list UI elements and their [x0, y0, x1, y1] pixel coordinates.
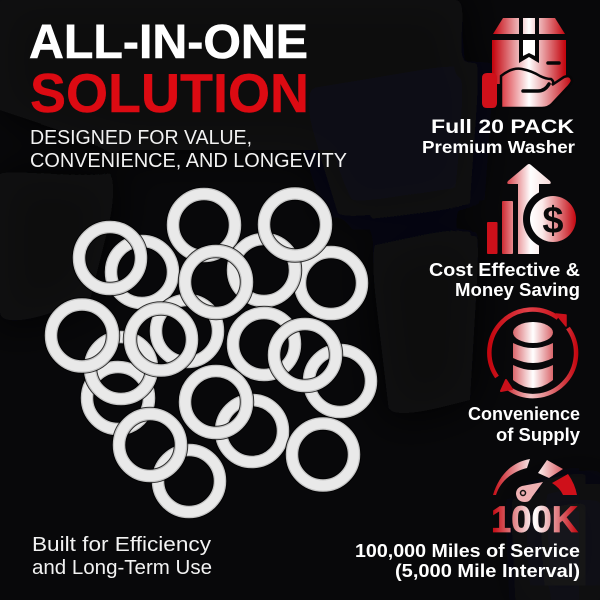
caption: and Long-Term Use — [32, 557, 212, 579]
label: cost effective — [429, 260, 580, 300]
title: SOLUTION — [30, 62, 309, 124]
subtitle: DESIGNED FOR VALUE, — [30, 127, 252, 149]
icon: box in hand — [482, 18, 572, 108]
label: convenience of supply: Convenience — [468, 404, 580, 424]
subtitle — [30, 127, 347, 172]
title — [29, 16, 309, 124]
label: cost effective: Money Saving — [455, 280, 580, 300]
label: convenience of supply — [468, 404, 580, 445]
title: ALL-IN-ONE — [29, 16, 308, 69]
label: miles of service: 100,000 Miles of Service — [355, 541, 580, 561]
label: convenience of supply: of Supply — [496, 425, 580, 445]
subtitle: CONVENIENCE, AND LONGEVITY — [30, 150, 347, 172]
washer rings — [51, 194, 371, 512]
label: miles of service — [355, 541, 580, 581]
icon: supply cycle database — [489, 310, 576, 396]
caption: Built for Efficiency — [32, 534, 211, 556]
caption — [32, 534, 212, 579]
label: full 20 pack: Full 20 PACK — [431, 117, 574, 138]
label: cost effective: Cost Effective & — [429, 260, 580, 280]
label: miles of service: (5,000 Mile Interval) — [395, 561, 580, 581]
label: full 20 pack — [422, 117, 575, 157]
label: full 20 pack: Premium Washer — [422, 137, 575, 157]
icon: cost chart with dollar coin: $ — [542, 200, 564, 242]
icon: 100K speedometer: 100K — [491, 499, 578, 540]
icon: cost chart with dollar coin — [487, 164, 583, 254]
icon: 100K speedometer — [491, 459, 578, 540]
